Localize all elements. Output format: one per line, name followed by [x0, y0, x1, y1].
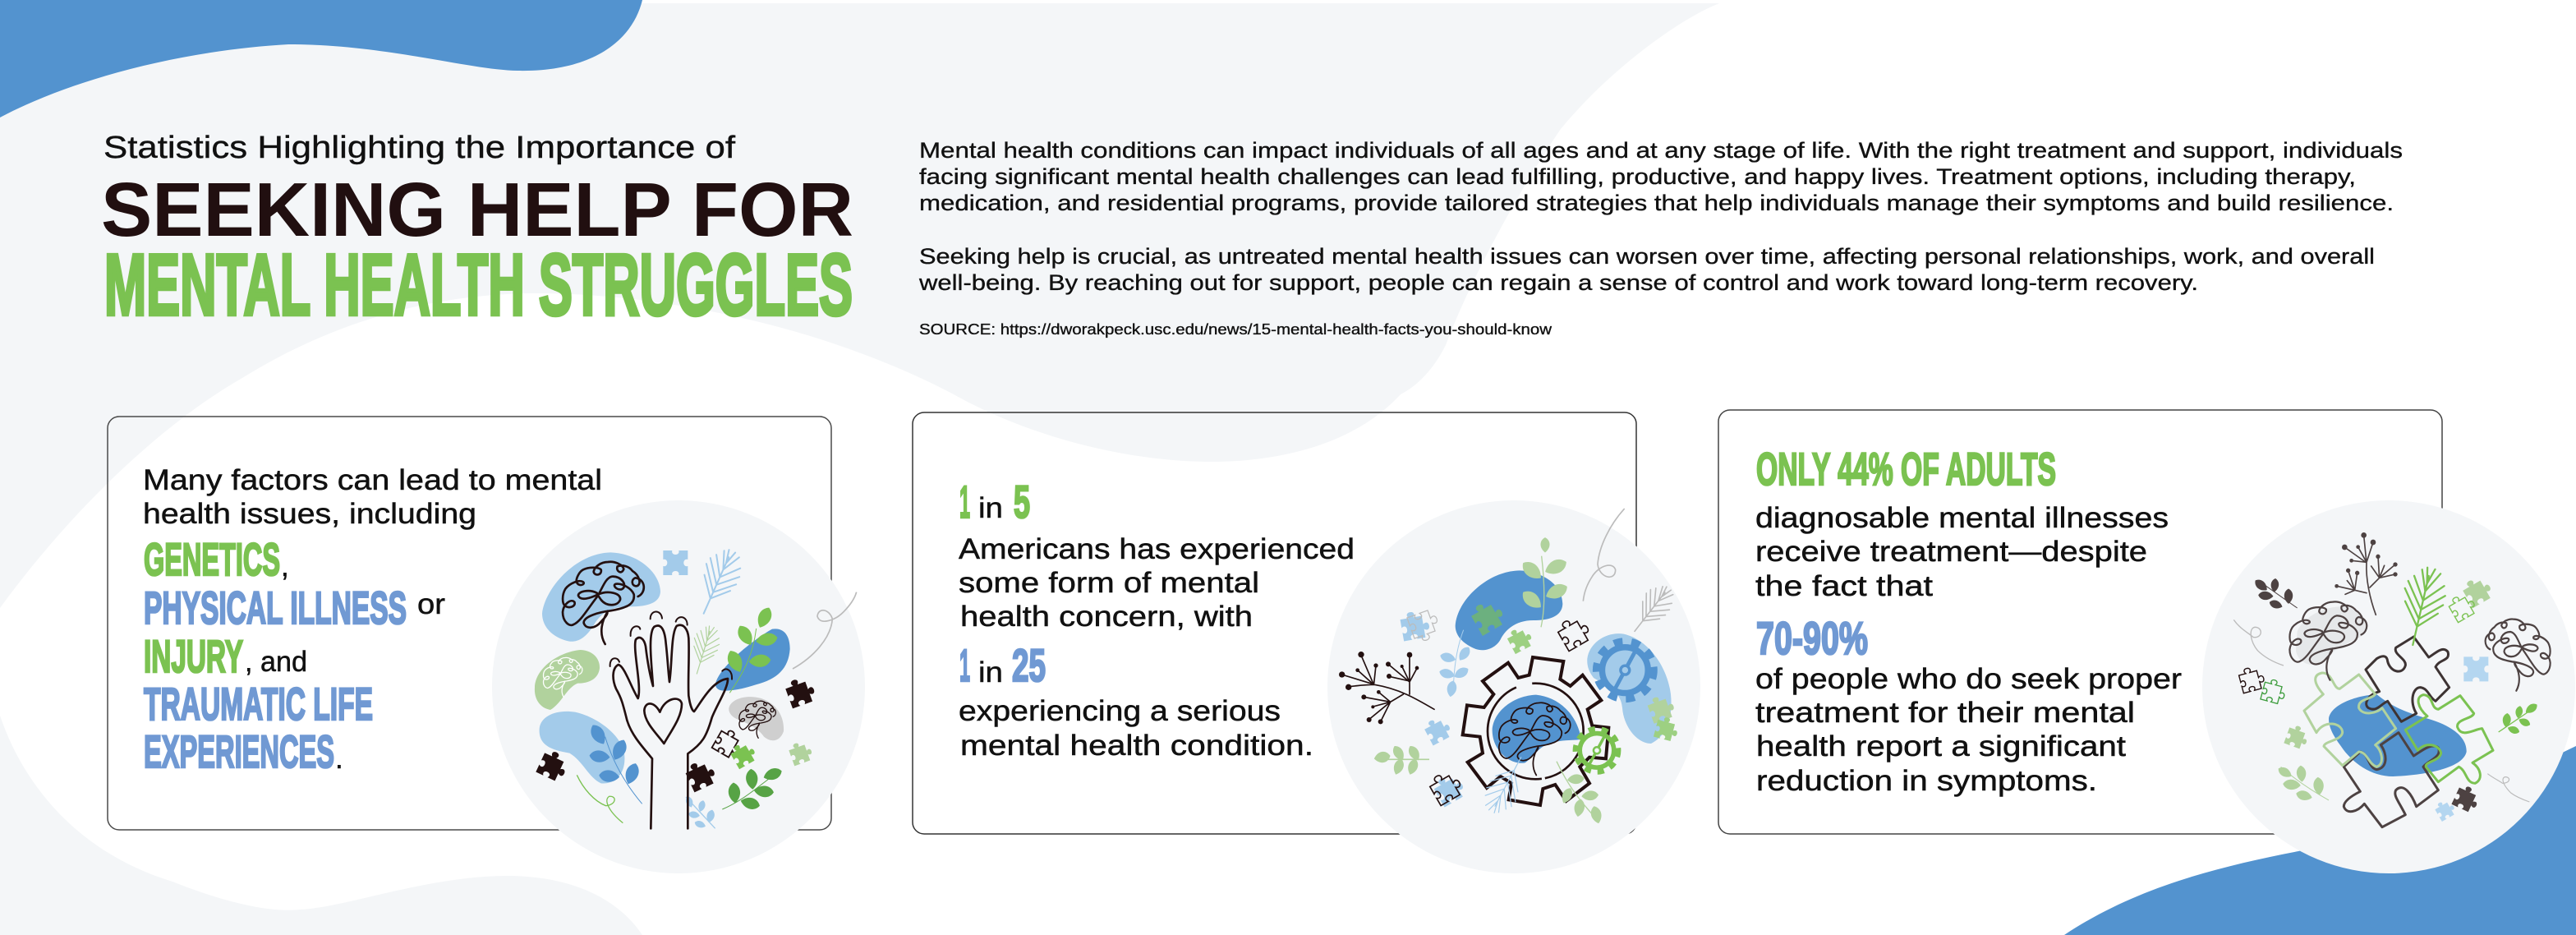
stat: 25: 25 [1012, 639, 1046, 691]
in: in [978, 492, 1003, 524]
period: . [335, 743, 343, 775]
body line 4: experiencing a serious [959, 695, 1281, 727]
body line 5: mental health condition. [960, 730, 1313, 762]
injury: INJURY [144, 630, 243, 682]
intro text [918, 138, 2403, 338]
title [101, 131, 853, 334]
intro line 4: Seeking help is crucial, as untreated mental health issues can worsen over time, affecting personal relationships, work, and overall [919, 244, 2375, 269]
title line: seeking help: SEEKING HELP FOR [101, 167, 853, 252]
intro line 2: facing significant mental health challenges can lead fulfilling, productive, and happy lives. Treatment options, including therapy, [919, 164, 2356, 189]
factors card text [143, 464, 602, 777]
and: , and [245, 646, 307, 678]
body line 5: treatment for their mental [1755, 697, 2135, 729]
intro line 5: well-being. By reaching out for support, people can regain a sense of control and work toward long-term recovery. [918, 270, 2198, 295]
body line 3: the fact that [1755, 570, 1933, 602]
experiences: EXPERIENCES [144, 725, 334, 777]
body line 2: some form of mental [959, 567, 1259, 599]
1 in 5 card text: 1 [959, 476, 970, 527]
illustration: gear with brain [1327, 500, 1700, 873]
body line 3: health concern, with [960, 601, 1253, 633]
body line 1: Americans has experienced [959, 533, 1355, 565]
stat: 5: 5 [1014, 476, 1030, 527]
body line 4: of people who do seek proper [1755, 663, 2182, 695]
intro line 1: Mental health conditions can impact individuals of all ages and at any stage of life. With the right treatment and support, individuals [919, 138, 2403, 163]
stat: 70-90%: 70-90% [1756, 612, 1868, 664]
body line 6: health report a significant [1756, 730, 2126, 762]
background: blue bottom-right blob [2064, 746, 2576, 935]
panel: treatment card [1718, 410, 2442, 834]
illustration: hand, brains and leaves [492, 500, 865, 873]
intro sentence: Many factors can lead to mental [143, 464, 602, 496]
background: blue top-left blob [0, 0, 642, 117]
illustration: puzzle pieces and brains [2202, 500, 2575, 873]
panel: factors card [108, 417, 831, 830]
genetics: GENETICS [144, 533, 280, 585]
or: or [417, 588, 445, 620]
1 in 5 card text [959, 476, 1355, 762]
intro sentence line 2: health issues, including [143, 498, 476, 530]
body line 7: reduction in symptoms. [1756, 765, 2097, 797]
1 in 5 card text: 1 [959, 639, 970, 691]
background: pale grey wave [0, 0, 1719, 608]
traumatic life: TRAUMATIC LIFE [144, 678, 373, 730]
title line: mental health struggles: MENTAL HEALTH STRUGGLES [104, 237, 853, 334]
intro line 3: medication, and residential programs, provide tailored strategies that help individuals manage their symptoms and build resilience. [919, 191, 2394, 215]
background: pale grey lower-left wave [0, 716, 642, 935]
body line 2: receive treatment—despite [1755, 536, 2147, 568]
stat: only 44%: ONLY 44% OF ADULTS [1756, 443, 2056, 495]
body line 1: diagnosable mental illnesses [1755, 502, 2169, 534]
panel: 1 in 5 card [913, 412, 1636, 834]
source line: SOURCE: https://dworakpeck.usc.edu/news/15-mental-health-facts-you-should-know [919, 321, 1552, 338]
in second: in [978, 656, 1003, 689]
title kicker: Statistics Highlighting the Importance of [104, 131, 736, 165]
treatment card text [1755, 443, 2182, 797]
physical illness: PHYSICAL ILLNESS [144, 582, 407, 633]
comma: , [281, 550, 289, 583]
